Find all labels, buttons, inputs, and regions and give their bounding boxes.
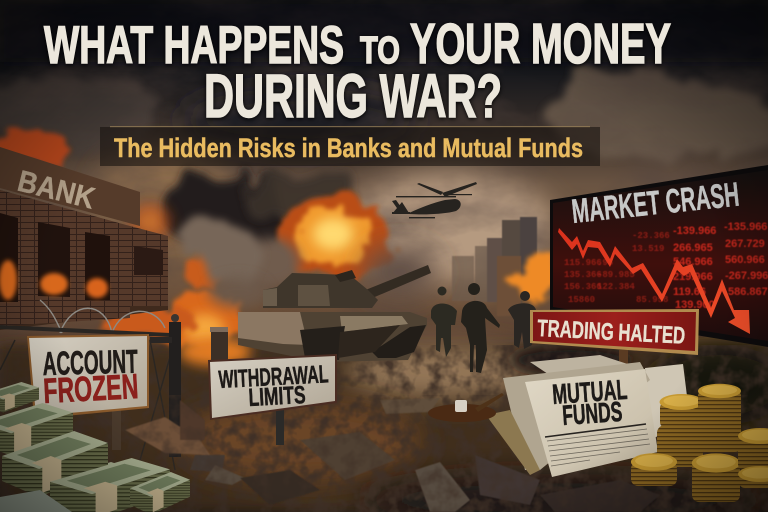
rubble behind signs xyxy=(125,398,660,512)
article rules xyxy=(545,424,650,466)
tank xyxy=(238,265,431,362)
fire: explosion centre and smoke xyxy=(163,170,436,297)
coin stack C xyxy=(698,384,741,452)
tank turret xyxy=(263,273,378,308)
coin stack F and G xyxy=(738,428,768,488)
subtitle band xyxy=(100,126,600,166)
stock ticker numbers xyxy=(564,221,768,311)
stock ticker numbers: 586.867 xyxy=(728,286,768,298)
soldiers xyxy=(431,283,536,373)
stock ticker numbers: 119.66 xyxy=(673,286,706,298)
stock ticker numbers: 122.384 xyxy=(597,282,635,292)
sign text: BANK: BANK xyxy=(14,165,98,216)
fire: around tank and left side xyxy=(0,130,555,366)
helicopter xyxy=(392,182,477,218)
money stacks xyxy=(0,382,190,512)
label: LIMITS: LIMITS xyxy=(248,381,306,412)
stock ticker numbers: 560.966 xyxy=(725,254,765,266)
tank gun barrel xyxy=(358,265,431,302)
stock ticker numbers: 546.966 xyxy=(673,256,713,268)
headline: MUTUAL: MUTUAL xyxy=(551,374,628,410)
stock ticker numbers: .96 xyxy=(597,258,613,268)
stock ticker numbers: 115.966 xyxy=(564,258,602,268)
stock ticker numbers: -23.366 xyxy=(632,231,670,241)
grey smoke puffs over the fire xyxy=(176,220,268,308)
bank building xyxy=(0,147,168,330)
label: FROZEN: FROZEN xyxy=(42,367,139,411)
stock ticker numbers: -89.985 xyxy=(597,270,635,280)
label: ACCOUNT: ACCOUNT xyxy=(42,343,138,382)
tank tracks xyxy=(300,326,345,360)
stock ticker numbers: 156.366 xyxy=(564,282,602,292)
falling chart arrow xyxy=(558,228,750,334)
coin stack D xyxy=(631,453,677,486)
coin stack E xyxy=(692,453,740,502)
trading halted sign xyxy=(530,309,699,370)
stock ticker numbers: -135.966 xyxy=(724,221,767,233)
barrel post xyxy=(210,327,228,363)
distant city skyline xyxy=(452,217,537,316)
gold coin stacks xyxy=(631,384,768,502)
withdrawal limits sign xyxy=(208,354,337,445)
fence post xyxy=(150,314,181,457)
stock ticker numbers: -139.966 xyxy=(673,225,716,237)
title: WHAT HAPPENS xyxy=(44,16,344,75)
title: DURING WAR? xyxy=(204,62,502,130)
label: WITHDRAWAL: WITHDRAWAL xyxy=(218,360,329,394)
headline: FUNDS: FUNDS xyxy=(561,396,623,431)
mutual funds newspaper xyxy=(486,355,690,477)
tank hull xyxy=(238,312,427,362)
bank windows with fire xyxy=(0,213,163,302)
ground grit over rubble xyxy=(0,395,768,512)
barbed wire fence xyxy=(0,300,175,470)
title: TO xyxy=(360,30,400,72)
stock ticker numbers: 135.366 xyxy=(564,270,602,280)
subtitle: The Hidden Risks in Banks and Mutual Funds xyxy=(114,133,583,163)
stock ticker numbers: 267.729 xyxy=(725,238,765,250)
stock ticker numbers: 219.966 xyxy=(673,271,713,283)
stock ticker numbers: 139.900 xyxy=(675,299,715,311)
small cup and plate on ground xyxy=(428,393,504,422)
label: TRADING HALTED: TRADING HALTED xyxy=(537,315,686,350)
coin stack A and B xyxy=(657,394,704,467)
stock ticker numbers: 85.958 xyxy=(636,295,668,305)
title xyxy=(44,12,671,130)
stock ticker numbers: 15860 xyxy=(568,295,595,305)
stock ticker numbers: -267.996 xyxy=(725,270,768,282)
account frozen sign xyxy=(27,334,149,450)
stock ticker numbers: 266.965 xyxy=(673,242,713,254)
stock ticker numbers: 13.519 xyxy=(632,244,664,254)
market crash board xyxy=(550,165,768,347)
